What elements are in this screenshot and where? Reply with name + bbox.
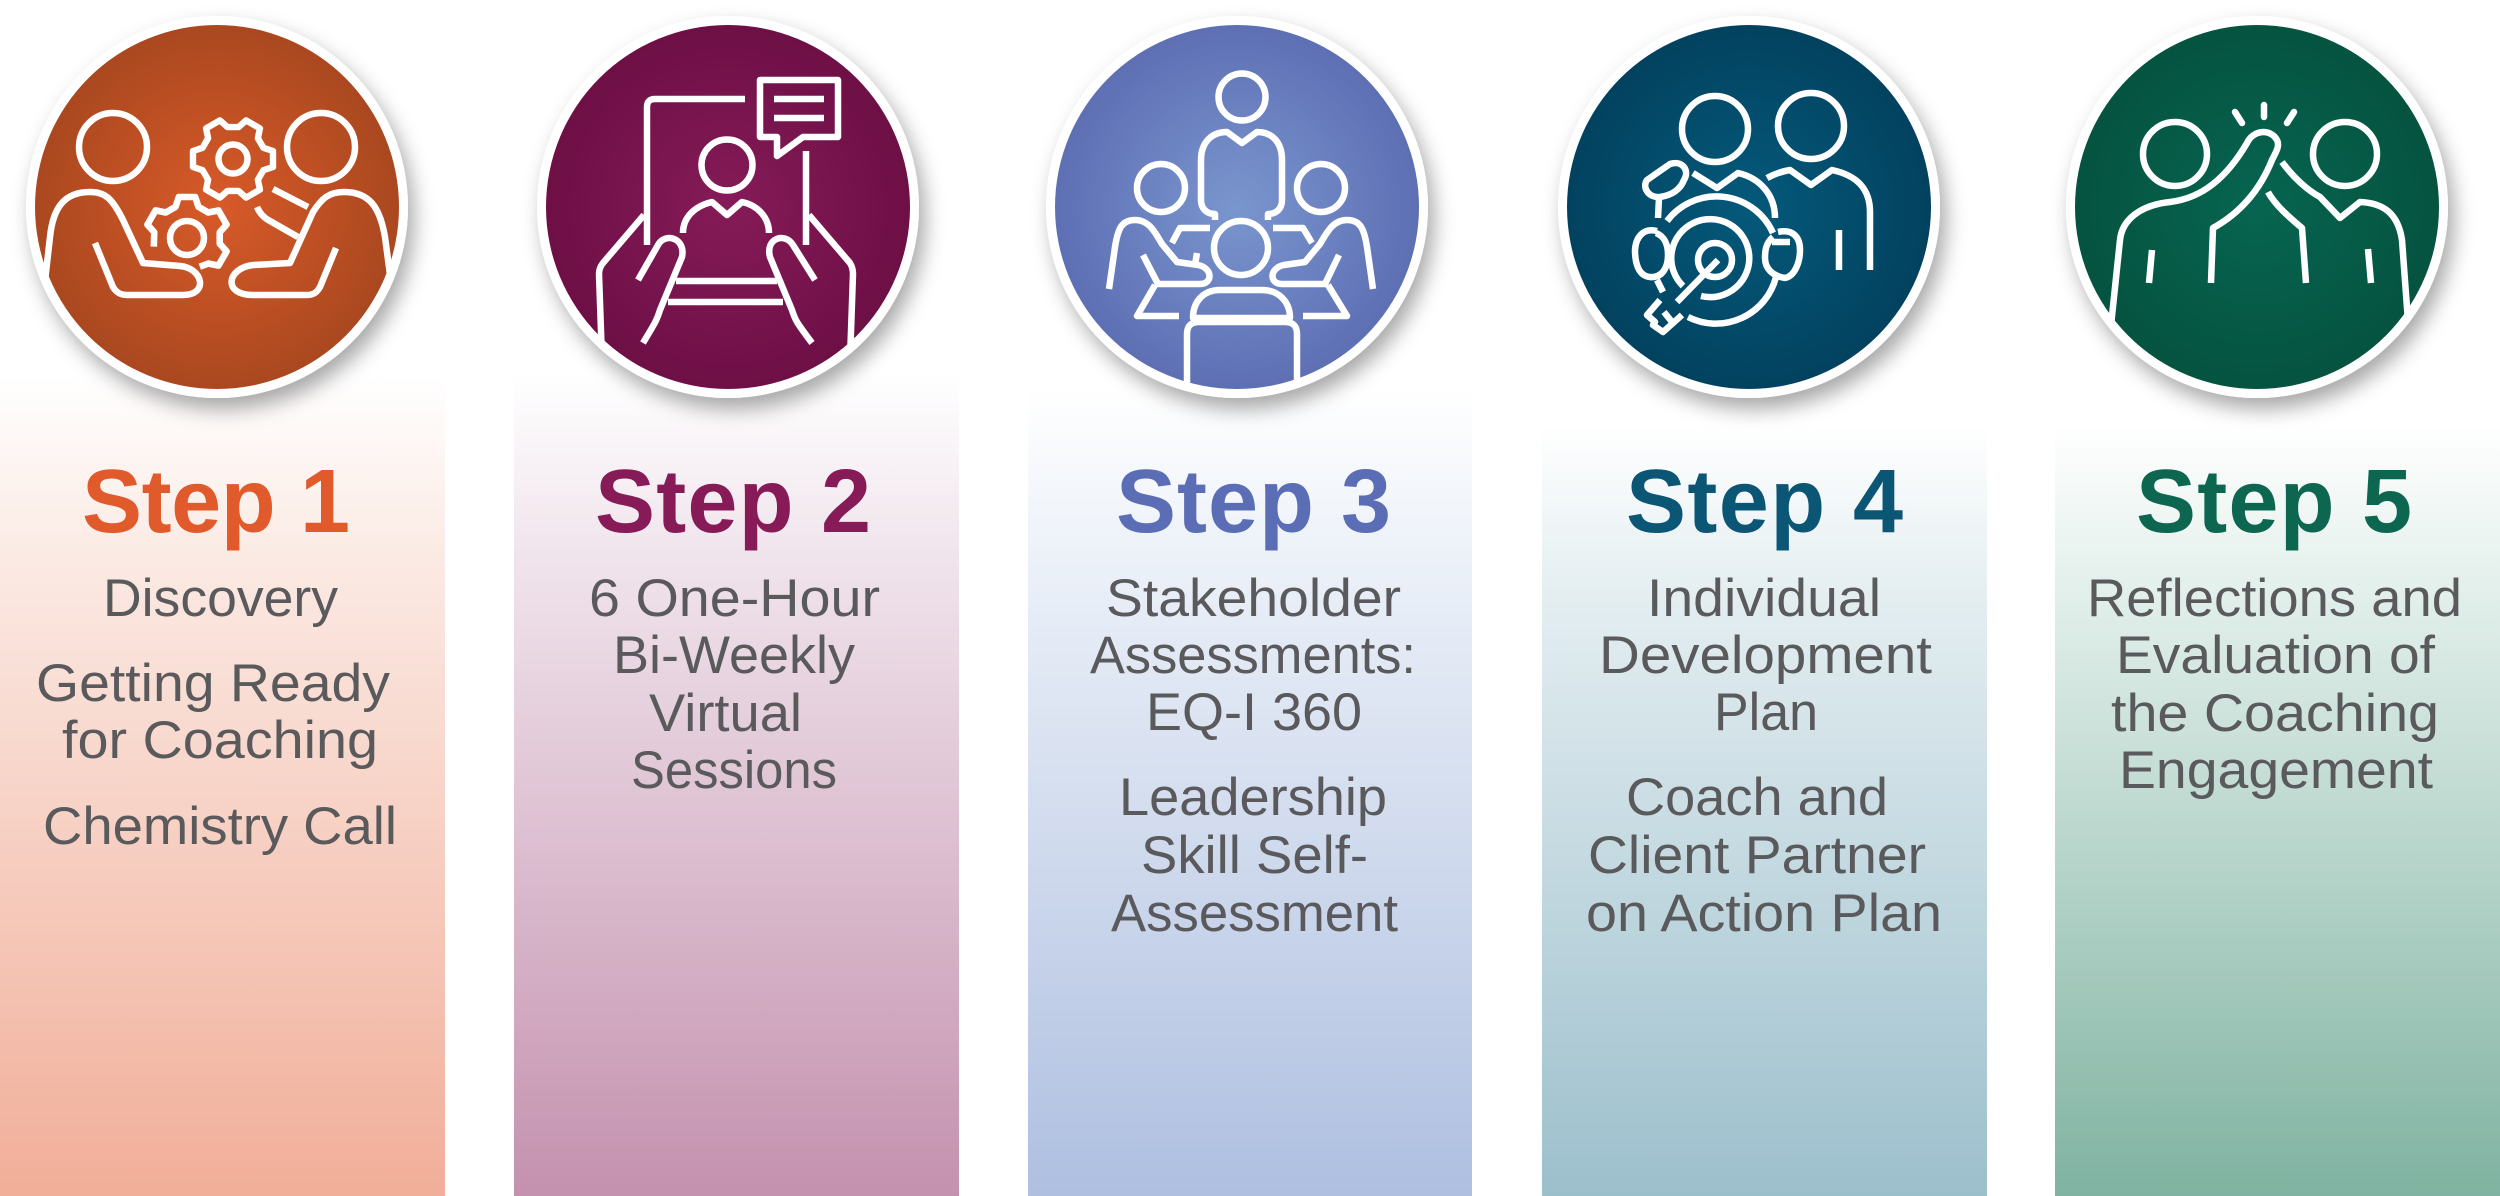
text: step 4 details: Individual	[1647, 569, 1881, 628]
panel: step 2	[514, 16, 959, 1196]
text: step 1 details: Getting Ready	[36, 654, 391, 713]
text: step 4 details: Coach and	[1626, 768, 1888, 827]
text: step 2 details: Virtual	[649, 684, 802, 743]
panel: step 5	[2055, 16, 2500, 1196]
text: step 5 details: the Coaching	[2111, 684, 2439, 743]
icon: people with target and arrow	[1558, 16, 1940, 398]
text: step 1 details: Discovery	[103, 569, 339, 628]
heading: step 3: Step 3	[1116, 452, 1391, 552]
text: step 4 details: Development	[1599, 626, 1932, 685]
text: step 3 details: EQ-I 360	[1146, 683, 1362, 742]
text: step 2 details: 6 One-Hour	[589, 569, 880, 628]
text: step 3 details: Stakeholder	[1106, 569, 1401, 628]
text: step 5 details	[2087, 569, 2462, 800]
icon: group meeting around table	[1046, 16, 1428, 398]
icon: two people with gears	[26, 16, 408, 398]
icon: virtual session on tablet	[537, 16, 919, 398]
panel: step 4	[1542, 16, 1987, 1196]
text: step 2 details: Bi-Weekly	[613, 626, 855, 685]
text: step 1 details	[36, 569, 397, 856]
text: step 5 details: Reflections and	[2087, 569, 2462, 628]
heading: step 5: Step 5	[2136, 452, 2412, 552]
icon: two people high five	[2066, 16, 2448, 398]
text: step 5 details: Engagement	[2119, 741, 2433, 800]
text: step 2 details	[589, 569, 880, 800]
text: step 5 details: Evaluation of	[2116, 626, 2435, 685]
text: step 3 details	[1090, 569, 1416, 943]
text: step 3 details: Skill Self-	[1141, 826, 1368, 885]
text: step 2 details: Sessions	[631, 741, 837, 800]
text: step 3 details: Assessment	[1111, 884, 1398, 943]
heading: step 2: Step 2	[595, 452, 871, 552]
panel: step 1	[0, 16, 445, 1196]
text: step 3 details: Leadership	[1119, 768, 1387, 827]
text: step 4 details	[1586, 569, 1942, 943]
text: step 1 details: for Coaching	[62, 711, 378, 770]
text: step 4 details: on Action Plan	[1586, 884, 1942, 943]
heading: step 1: Step 1	[82, 452, 350, 552]
text: step 1 details: Chemistry Call	[43, 797, 397, 856]
text: step 4 details: Plan	[1714, 683, 1818, 742]
heading: step 4: Step 4	[1626, 452, 1903, 552]
text: step 4 details: Client Partner	[1588, 826, 1926, 885]
panel: step 3	[1028, 16, 1472, 1196]
text: step 3 details: Assessments:	[1090, 626, 1416, 685]
